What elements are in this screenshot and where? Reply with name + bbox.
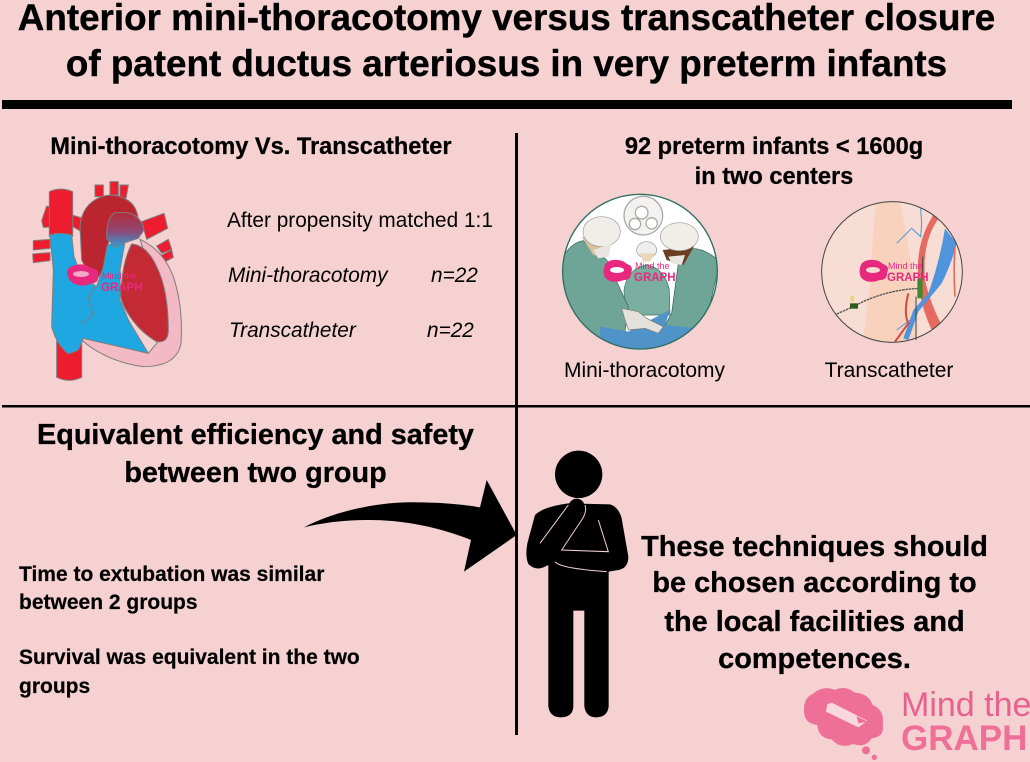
heading: population: 92 preterm infants < 1600g [625, 134, 923, 160]
text: propensity matching [227, 209, 493, 342]
logo: Mind the Graph: GRAPH [901, 719, 1027, 758]
watermark: catheter [860, 260, 929, 284]
text: conclusion: These techniques should [641, 531, 988, 563]
icon: catheter in circle [822, 200, 962, 343]
text: propensity matching: n=22 [427, 319, 474, 342]
title [18, 0, 995, 84]
text: conclusion [641, 531, 988, 675]
watermark: catheter: Mind the [888, 261, 923, 271]
panel: study design [33, 134, 493, 380]
arrow [304, 480, 517, 572]
watermark: heart: GRAPH [101, 282, 143, 294]
text: outcomes: Time to extubation was similar [19, 563, 324, 586]
text: propensity matching: n=22 [431, 264, 478, 287]
text: outcomes: groups [19, 675, 90, 698]
icon: surgeons in circle [560, 194, 720, 353]
watermark: heart: Mind the [102, 271, 137, 281]
watermark: catheter: GRAPH [887, 272, 929, 284]
heading: population: in two centers [695, 164, 853, 190]
text: conclusion: competences. [718, 643, 911, 675]
heading: population [625, 134, 923, 190]
heading: equivalent efficiency [37, 419, 474, 489]
heading: equivalent efficiency: between two group [124, 457, 387, 489]
panel: population [560, 134, 962, 382]
text: conclusion: be chosen according to [652, 567, 977, 599]
watermark: surgeons: GRAPH [634, 272, 676, 284]
watermark: surgeons: Mind the [635, 261, 670, 271]
watermark: surgeons [604, 260, 676, 284]
panel: conclusion [526, 451, 988, 717]
heading: mini-thoracotomy vs transcatheter: Mini-thoracotomy Vs. Transcatheter [50, 134, 452, 160]
icon: heart with patent ductus [33, 182, 181, 380]
text: propensity matching: Transcatheter [229, 319, 357, 342]
label: transcatheter: Transcatheter [825, 359, 953, 382]
heading: equivalent efficiency: Equivalent efficiency and safety [37, 419, 474, 451]
icon: thinking person [526, 451, 628, 717]
icon: brain with pencil [804, 688, 883, 760]
text: outcomes [19, 563, 360, 698]
text: propensity matching: After propensity matched 1:1 [227, 209, 493, 232]
text: outcomes: between 2 groups [19, 591, 198, 614]
text: conclusion: the local facilities and [664, 606, 965, 638]
panel: results [19, 419, 517, 698]
title: of patent ductus arteriosus in very preterm infants [66, 43, 947, 84]
logo: Mind the Graph [804, 686, 1030, 760]
text: logo wordmark: Mind the [901, 686, 1030, 724]
label: mini-thoracotomy: Mini-thoracotomy [564, 359, 726, 382]
text: outcomes: Survival was equivalent in the two [19, 646, 360, 669]
watermark: heart [67, 264, 143, 294]
text: propensity matching: Mini-thoracotomy [228, 264, 389, 287]
